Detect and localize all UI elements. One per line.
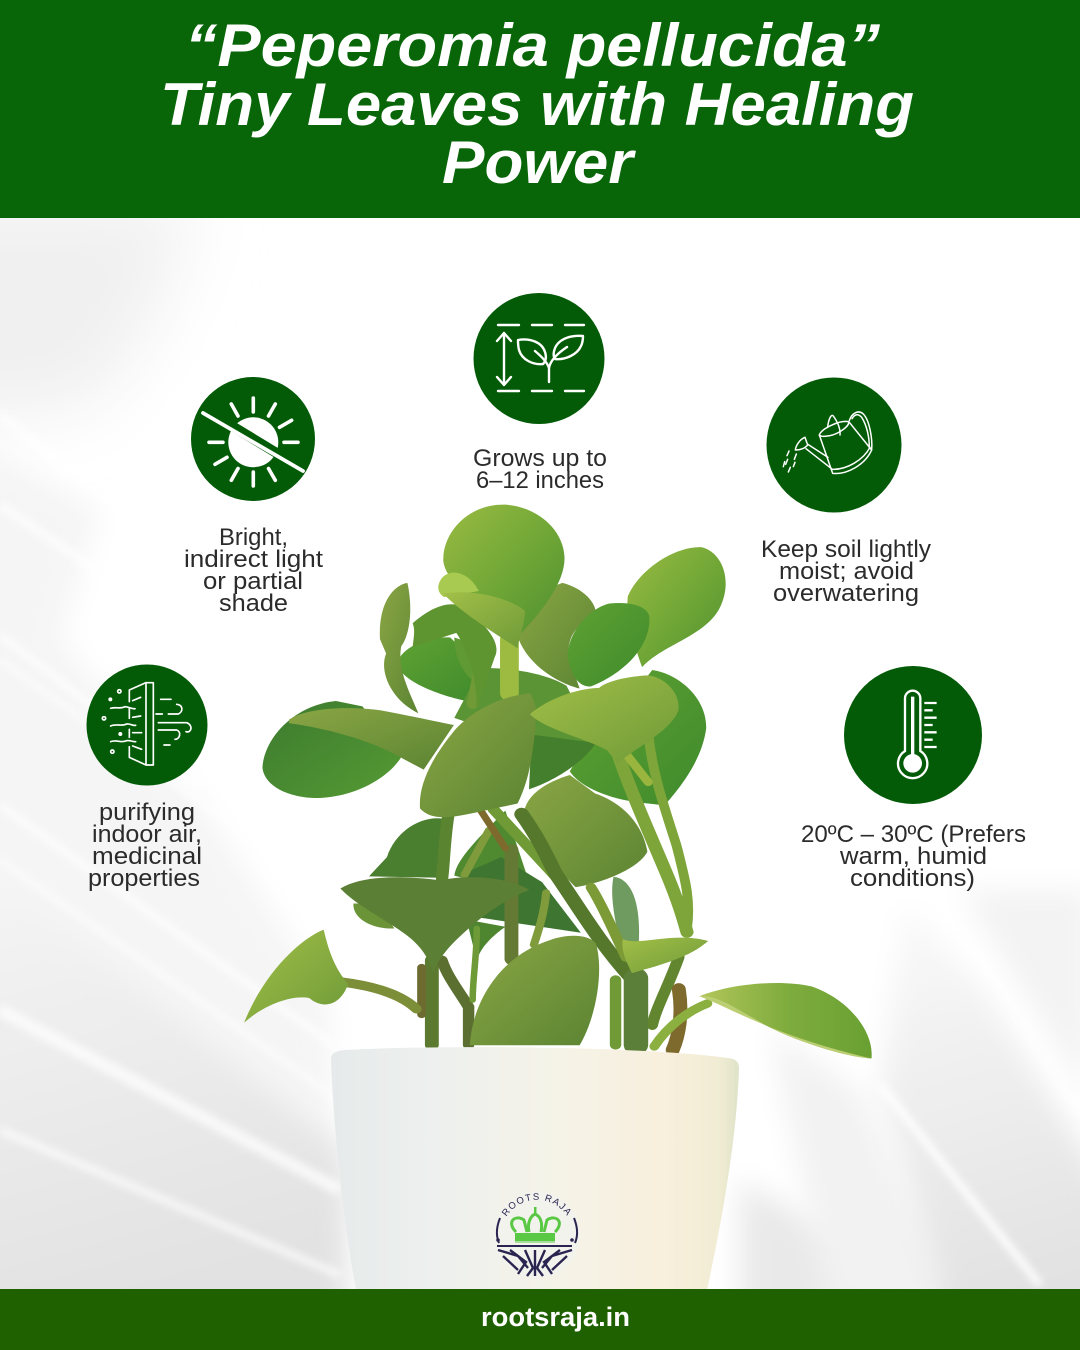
label: air purifying: purifying (99, 799, 195, 826)
label: watering: overwatering (773, 580, 919, 607)
label: watering (761, 536, 931, 607)
logo: Roots Raja: ROOTS RAJA (502, 1193, 570, 1216)
title: “Peperomia pellucida” (185, 12, 880, 79)
label: temperature: 20ºC – 30ºC (Prefers (801, 821, 1026, 848)
label: air purifying: medicinal (92, 843, 202, 870)
title: Power (442, 129, 637, 196)
label: plant height (473, 445, 607, 494)
label: light (184, 524, 323, 617)
label: watering: Keep soil lightly (761, 536, 931, 563)
icon: plant height (474, 293, 604, 424)
feature: watering (761, 378, 931, 607)
label: light: Bright, (219, 524, 288, 551)
header band (0, 0, 1080, 218)
icon: air filter (86, 664, 208, 786)
feature: temperature (801, 666, 1026, 892)
icon: thermometer (844, 666, 982, 804)
footer website: rootsraja.in (481, 1302, 630, 1332)
feature: plant height (473, 293, 607, 494)
label: air purifying: indoor air, (92, 821, 202, 848)
label: air purifying (88, 799, 202, 892)
feature: air purifying (86, 664, 208, 892)
label: light: indirect light (184, 546, 323, 573)
pot (331, 1047, 739, 1289)
footer band (0, 1289, 1080, 1350)
label: air purifying: properties (88, 865, 200, 892)
label: plant height: 6–12 inches (476, 467, 604, 494)
label: temperature: warm, humid (839, 843, 987, 870)
label: light: or partial (203, 568, 303, 595)
label: temperature: conditions) (850, 865, 975, 892)
label: light: shade (219, 590, 288, 617)
plant illustration (244, 505, 872, 1059)
back leaves (353, 583, 706, 961)
front leaves (244, 505, 872, 1059)
title (160, 12, 914, 196)
stems (342, 639, 707, 1050)
icon: watering can (766, 378, 902, 512)
label: watering: moist; avoid (779, 558, 914, 585)
label: plant height: Grows up to (473, 445, 607, 472)
title: Tiny Leaves with Healing (160, 71, 914, 138)
label: temperature (801, 821, 1026, 892)
logo: Roots Raja (496, 1193, 580, 1277)
feature: light (184, 377, 323, 617)
icon: sun with slash (191, 377, 315, 501)
